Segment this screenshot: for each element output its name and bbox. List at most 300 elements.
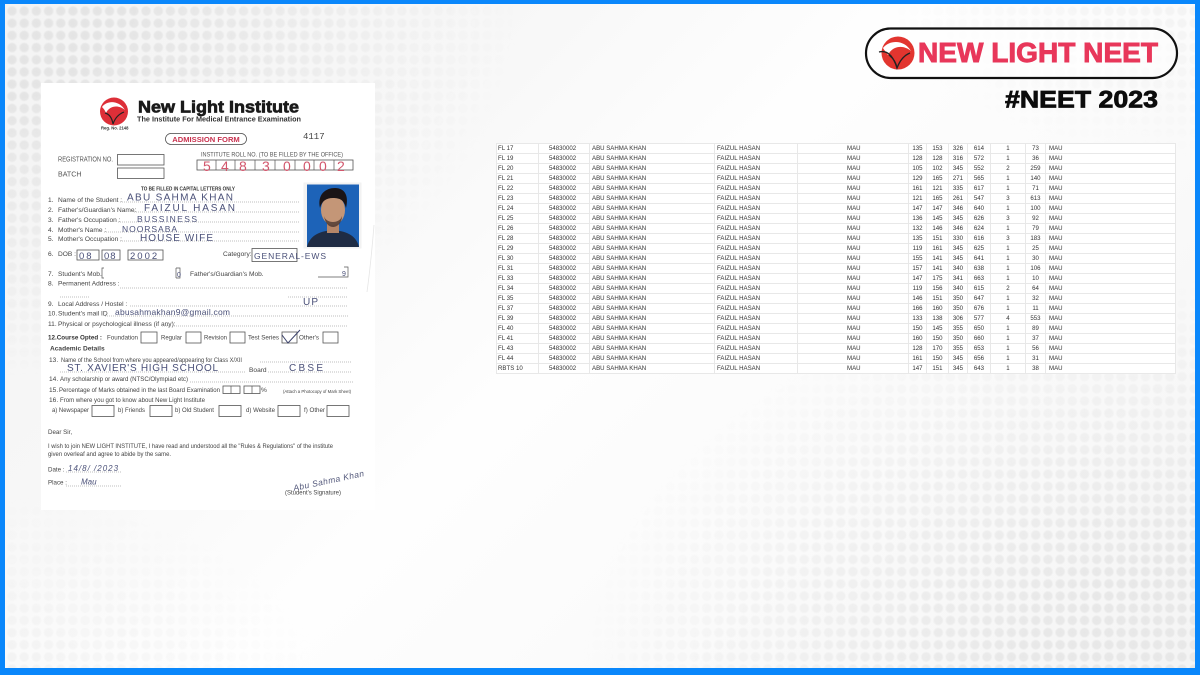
row: FL 41: 54830002 [549,335,576,342]
row: FL 22: 121 [932,185,943,192]
row: FL 23: FL 23 [498,195,513,202]
personal details: 3. [48,217,54,224]
row: FL 24: 147 [932,205,943,212]
how you heard options: From where you got to know about New Light Institute [60,397,205,404]
addresses and contact: 9. [48,301,54,308]
row: FL 19: 128 [912,155,923,162]
row: FL 20: 552 [974,165,984,172]
row: FL 43: 170 [932,345,943,352]
row: FL 34: 119 [913,285,922,292]
row: FL 33: FL 33 [498,275,513,282]
row: FL 41: FL 41 [498,335,513,342]
mobile numbers [48,267,348,279]
row: RBTS 10: 643 [974,365,984,372]
row: FL 41: MAU [1049,335,1063,342]
row: FL 39: 138 [932,315,943,322]
row: FL 39: FL 39 [498,315,513,322]
row: FL 41: 37 [1032,335,1039,342]
row: FL 37: 54830002 [549,305,576,312]
row: FL 20: FAIZUL HASAN [717,165,760,172]
row: FL 21: FL 21 [498,175,513,182]
row: FL 34: 54830002 [549,285,576,292]
student signature: Abu Sahma Khan [291,468,365,493]
row: FL 41 [498,335,1063,342]
row: FL 30: 345 [953,255,963,262]
row: FL 17: 1 [1006,145,1010,152]
row: FL 33: MAU [1049,275,1063,282]
row: FL 22: 335 [953,185,963,192]
academic details: Name of the School from where you appeared/appearing for Class X/XII [61,357,242,364]
row: FL 39 [498,315,1063,322]
row: FL 23: 121 [912,195,923,202]
form header with logo and institute name: New Light Institute [138,98,299,116]
row: FL 31 [498,265,1063,272]
date of birth and category: DOB : [58,251,76,258]
row: FL 21: 271 [953,175,963,182]
row: FL 23: MAU [1049,195,1063,202]
row: FL 17: 153 [932,145,943,152]
row: FL 28: ABU SAHMA KHAN [592,235,646,242]
row: FL 34 [498,285,1063,292]
row: FL 22: 161 [912,185,923,192]
course opted: Test Series [248,334,280,342]
registration and batch: BATCH [58,170,82,178]
course opted: Foundation [107,334,138,342]
row: FL 44: 31 [1032,355,1039,362]
row: FL 33: 663 [974,275,984,282]
row: FL 35: ABU SAHMA KHAN [592,295,646,302]
row: FL 26: ABU SAHMA KHAN [592,225,646,232]
row: FL 20: FL 20 [498,165,513,172]
row: FL 25: MAU [1049,215,1063,222]
row: FL 37 [498,305,1063,312]
row: FL 25: MAU [847,215,861,222]
row: FL 44 [498,355,1063,362]
row: FL 17: MAU [847,145,861,152]
icon: New Light logo [879,36,914,70]
row: FL 35: FL 35 [498,295,513,302]
course opted: Regular [161,334,183,342]
row: FL 26: 624 [974,225,984,232]
row: FL 30: 641 [974,255,984,262]
row: FL 19: FL 19 [498,155,513,162]
row: FL 23: 54830002 [549,195,576,202]
row: FL 28: 616 [974,235,984,242]
row: FL 22: 71 [1032,185,1039,192]
addresses and contact: Local Address / Hostel : [58,301,127,308]
row: FL 37: FL 37 [498,305,513,312]
row: FL 29: 345 [953,245,963,252]
mobile numbers: 9 [342,271,346,278]
row: FL 35: 647 [974,295,984,302]
row: FL 28: FL 28 [498,235,513,242]
row: FL 35 [498,295,1063,302]
row: FL 40: MAU [1049,325,1063,332]
row: FL 37: 166 [912,305,923,312]
row: RBTS 10 [498,365,1063,372]
row: FL 21: 1 [1006,175,1010,182]
row: FL 25 [498,215,1063,222]
row: FL 26: 1 [1006,225,1010,232]
declaration: given overleaf and agree to abide by the same. [48,451,171,458]
row: FL 40 [498,325,1063,332]
row: FL 35: 350 [953,295,963,302]
date and place: Date : [48,466,65,474]
row: FL 26: 79 [1032,225,1039,232]
row: FL 34: 2 [1006,285,1010,292]
row: FL 20: 102 [932,165,943,172]
row: FL 26: FL 26 [498,225,513,232]
academic details: Any scholarship or award (NTSC/Olympiad etc) [60,376,188,383]
addresses and contact: Permanent Address : [58,280,120,288]
row: FL 24: 147 [912,205,923,212]
row: FL 26: 132 [912,225,923,232]
row: FL 43: ABU SAHMA KHAN [592,345,646,352]
row: FL 31: 141 [932,265,943,272]
row: FL 24: 54830002 [549,205,576,212]
personal details: Name of the Student : [58,197,122,204]
academic details: ST. XAVIER'S HIGH SCHOOL [67,363,218,374]
row: FL 35: 151 [932,295,943,302]
row: FL 17: ABU SAHMA KHAN [592,145,646,152]
row: FL 41: 660 [974,335,984,342]
row: FL 41: 160 [912,335,923,342]
row: FL 24: 640 [974,205,984,212]
how you heard options [49,397,349,416]
row: FL 28: 151 [932,235,943,242]
row: FL 19: MAU [847,155,861,162]
row: FL 19: ABU SAHMA KHAN [592,155,646,162]
how you heard options: a) Newspaper [52,407,90,414]
personal details [48,186,300,244]
registration and batch: REGISTRATION NO. [58,156,113,164]
personal details: 4. [48,227,54,234]
row: FL 39: ABU SAHMA KHAN [592,315,646,322]
row: FL 34: 615 [974,285,984,292]
row: FL 34: ABU SAHMA KHAN [592,285,646,292]
row: FL 44: FL 44 [498,355,513,362]
row: FL 24 [498,205,1063,212]
row: FL 39: 553 [1030,315,1041,322]
course opted [48,330,338,343]
row: FL 29: 54830002 [549,245,576,252]
row: FL 22 [498,185,1063,192]
how you heard options: b) Friends [118,407,146,414]
mobile numbers: 7. [48,271,54,278]
row: FL 20: 2 [1006,165,1010,172]
academic details: Percentage of Marks obtained in the last Board Examination [59,387,220,394]
row: RBTS 10: 54830002 [549,365,576,372]
personal details: HOUSE WIFE [140,233,213,244]
academic details: 15. [49,387,58,394]
personal details: 1. [48,197,54,204]
row: FL 29: FAIZUL HASAN [717,245,760,252]
row: FL 26: 54830002 [549,225,576,232]
row: FL 28 [498,235,1063,242]
row: FL 44: 150 [932,355,943,362]
how you heard options: b) Old Student [175,407,214,414]
form header with logo and institute name: The Institute For Medical Entrance Examination [137,114,301,124]
institute roll number: 54830002 [203,158,345,174]
row: FL 19: 36 [1032,155,1039,162]
row: FL 43: 653 [974,345,984,352]
row: FL 29: 161 [932,245,943,252]
declaration: I wish to join NEW LIGHT INSTITUTE, I have read and understood all the "Rules & Regulations" of the institute [48,443,334,450]
row: FL 44: 1 [1006,355,1010,362]
academic details: (Attach a Photocopy of Mark Sheet) [283,389,352,394]
row: FL 23: 165 [932,195,943,202]
date of birth and category: Category: [223,251,252,258]
addresses and contact: 11. [48,321,57,328]
row: FL 39: 306 [953,315,963,322]
row: FL 37: FAIZUL HASAN [717,305,760,312]
how you heard options: f) Other [304,407,326,414]
row: FL 34: FL 34 [498,285,513,292]
row: FL 28: 3 [1006,235,1010,242]
date and place [48,464,122,486]
row: FL 25: 145 [932,215,943,222]
mobile numbers: 0 [177,272,181,279]
row: FL 20: 345 [953,165,963,172]
addresses and contact: abusahmakhan9@gmail.com [115,307,230,317]
row: FL 30: 155 [912,255,923,262]
row: FL 34: 156 [932,285,943,292]
academic details: % [261,387,267,394]
row: FL 34: 340 [953,285,963,292]
academic details: Academic Details [50,346,105,352]
course opted: 12.Course Opted : [48,334,102,342]
row: FL 40: ABU SAHMA KHAN [592,325,646,332]
row: FL 41: 1 [1006,335,1010,342]
row: FL 43: 56 [1032,345,1039,352]
row: FL 22: 54830002 [549,185,576,192]
row: FL 41: 350 [953,335,963,342]
row: FL 31: 638 [974,265,984,272]
brand name: NEW LIGHT NEET [918,37,1158,68]
row: FL 20 [498,165,1063,172]
row: FL 31: ABU SAHMA KHAN [592,265,646,272]
row: FL 35: MAU [847,295,861,302]
row: FL 25: 92 [1032,215,1039,222]
row: FL 24: MAU [847,205,861,212]
row: FL 17: 54830002 [549,145,576,152]
row: FL 29: FL 29 [498,245,513,252]
row: FL 25: 626 [974,215,984,222]
row: FL 43: 54830002 [549,345,576,352]
row: FL 43: 1 [1006,345,1010,352]
institute roll number: INSTITUTE ROLL NO. (TO BE FILLED BY THE OFFICE) [201,152,343,158]
row: FL 17: 614 [974,145,984,152]
row: RBTS 10: 151 [932,365,943,372]
row: FL 23 [498,195,1063,202]
row: FL 28: MAU [1049,235,1063,242]
row: FL 20: 54830002 [549,165,576,172]
mobile numbers: Student's Mob. [58,271,102,278]
row: FL 25: ABU SAHMA KHAN [592,215,646,222]
row: FL 20: 259 [1030,165,1041,172]
date of birth and category: 08 [79,251,94,262]
row: FL 33: ABU SAHMA KHAN [592,275,646,282]
table: test results [496,143,1175,373]
icon: institute logo [100,98,128,126]
row: FL 21: MAU [847,175,861,182]
row: FL 33: 147 [912,275,923,282]
panel: admission form [41,83,375,510]
personal details: NOORSABA [122,224,177,234]
row: FL 24: ABU SAHMA KHAN [592,205,646,212]
row: FL 22: 617 [974,185,984,192]
row: FL 28: FAIZUL HASAN [717,235,760,242]
row: FL 30: 30 [1032,255,1039,262]
row: FL 41: MAU [847,335,861,342]
date of birth and category: 6. [48,251,54,258]
row: FL 17: FAIZUL HASAN [717,145,760,152]
row: RBTS 10: MAU [847,365,861,372]
row: FL 39: MAU [1049,315,1063,322]
row: FL 40: 89 [1032,325,1039,332]
row: FL 22: MAU [847,185,861,192]
row: FL 21: 140 [1030,175,1041,182]
row: FL 43: FAIZUL HASAN [717,345,760,352]
row: FL 29: MAU [1049,245,1063,252]
row: FL 17: MAU [1049,145,1063,152]
row: FL 28: 135 [912,235,923,242]
row: FL 43: FL 43 [498,345,513,352]
addresses and contact: 8. [48,280,54,288]
row: FL 29: ABU SAHMA KHAN [592,245,646,252]
row: FL 21: MAU [1049,175,1063,182]
row: FL 17: 135 [912,145,923,152]
row: FL 44: FAIZUL HASAN [717,355,760,362]
row: FL 30: FAIZUL HASAN [717,255,760,262]
row: RBTS 10: 38 [1032,365,1039,372]
row: FL 29 [498,245,1063,252]
row: FL 25: 136 [912,215,923,222]
row: FL 22: FAIZUL HASAN [717,185,760,192]
row: FL 24: MAU [1049,205,1063,212]
row: FL 23: 3 [1006,195,1010,202]
row: FL 20: 105 [912,165,923,172]
row: FL 40: 650 [974,325,984,332]
row: FL 40: 54830002 [549,325,576,332]
row: FL 37: 1 [1006,305,1010,312]
mobile numbers: Father's/Guardian's Mob. [190,271,264,278]
row: FL 29: 25 [1032,245,1039,252]
row: FL 40: 150 [912,325,923,332]
registration and batch [58,154,164,178]
row: FL 33: 341 [953,275,963,282]
row: FL 29: MAU [847,245,861,252]
row: FL 25: FL 25 [498,215,513,222]
row: FL 37: 160 [932,305,943,312]
row: FL 21: 129 [912,175,923,182]
row: FL 23: FAIZUL HASAN [717,195,760,202]
row: FL 22: 1 [1006,185,1010,192]
row: FL 43: 355 [953,345,963,352]
row: FL 23: ABU SAHMA KHAN [592,195,646,202]
course opted: Revision [204,334,227,342]
row: FL 23: MAU [847,195,861,202]
row: RBTS 10: RBTS 10 [498,365,523,372]
row: FL 44: 161 [912,355,923,362]
row: FL 41: FAIZUL HASAN [717,335,760,342]
row: FL 31: MAU [1049,265,1063,272]
row: FL 25: FAIZUL HASAN [717,215,760,222]
row: FL 25: 54830002 [549,215,576,222]
row: RBTS 10: FAIZUL HASAN [717,365,760,372]
row: FL 30: 54830002 [549,255,576,262]
academic details: Board [249,367,267,374]
row: FL 39: 54830002 [549,315,576,322]
row: RBTS 10: 1 [1006,365,1010,372]
row: FL 35: 32 [1032,295,1039,302]
form header with logo and institute name [100,98,301,130]
row: FL 26: 346 [953,225,963,232]
row: FL 34: MAU [1049,285,1063,292]
row: FL 43 [498,345,1063,352]
row: FL 39: 577 [974,315,984,322]
row: FL 29: 1 [1006,245,1010,252]
hashtag heading: #NEET 2023 [1005,86,1158,114]
academic details: 13. [49,357,58,364]
row: FL 30 [498,255,1063,262]
row: FL 43: MAU [847,345,861,352]
date of birth and category: 08 [104,251,117,262]
row: FL 24: 346 [953,205,963,212]
row: FL 19: MAU [1049,155,1063,162]
row: FL 33: 175 [932,275,943,282]
course opted: Other's [299,334,320,342]
row: FL 24: FL 24 [498,205,513,212]
row: FL 40: 355 [953,325,963,332]
row: FL 31: 1 [1006,265,1010,272]
row: FL 39: 133 [912,315,923,322]
addresses and contact: 10. [48,310,57,318]
row: FL 25: 3 [1006,215,1010,222]
row: FL 40: FAIZUL HASAN [717,325,760,332]
row: FL 34: MAU [847,285,861,292]
personal details: 2. [48,207,54,214]
row: FL 31: 54830002 [549,265,576,272]
row: FL 21: FAIZUL HASAN [717,175,760,182]
row: FL 26: MAU [847,225,861,232]
row: FL 22: ABU SAHMA KHAN [592,185,646,192]
row: FL 17: 326 [953,145,963,152]
row: FL 30: 141 [932,255,943,262]
addresses and contact: Physical or psychological illness (if any): [58,321,176,328]
row: FL 30: 1 [1006,255,1010,262]
date and place: Place : [48,480,67,486]
form header with logo and institute name: Reg. No. 2148 [101,126,129,130]
row: FL 31: 157 [912,265,923,272]
row: FL 44: 345 [953,355,963,362]
personal details: Mother's Occupation : [58,236,122,243]
row: FL 33: 54830002 [549,275,576,282]
row: FL 20: MAU [1049,165,1063,172]
row: RBTS 10: 345 [953,365,963,372]
academic details: 14. [49,376,58,383]
row: FL 39: 4 [1006,315,1010,322]
row: FL 26 [498,225,1063,232]
row: FL 19: 316 [953,155,963,162]
how you heard options: 16. [49,397,58,404]
row: FL 19: 572 [974,155,984,162]
date of birth and category: GENERAL-EWS [254,251,326,261]
academic details [49,346,354,394]
row: FL 29: 119 [913,245,922,252]
row: FL 40: 1 [1006,325,1010,332]
row: FL 41: ABU SAHMA KHAN [592,335,646,342]
